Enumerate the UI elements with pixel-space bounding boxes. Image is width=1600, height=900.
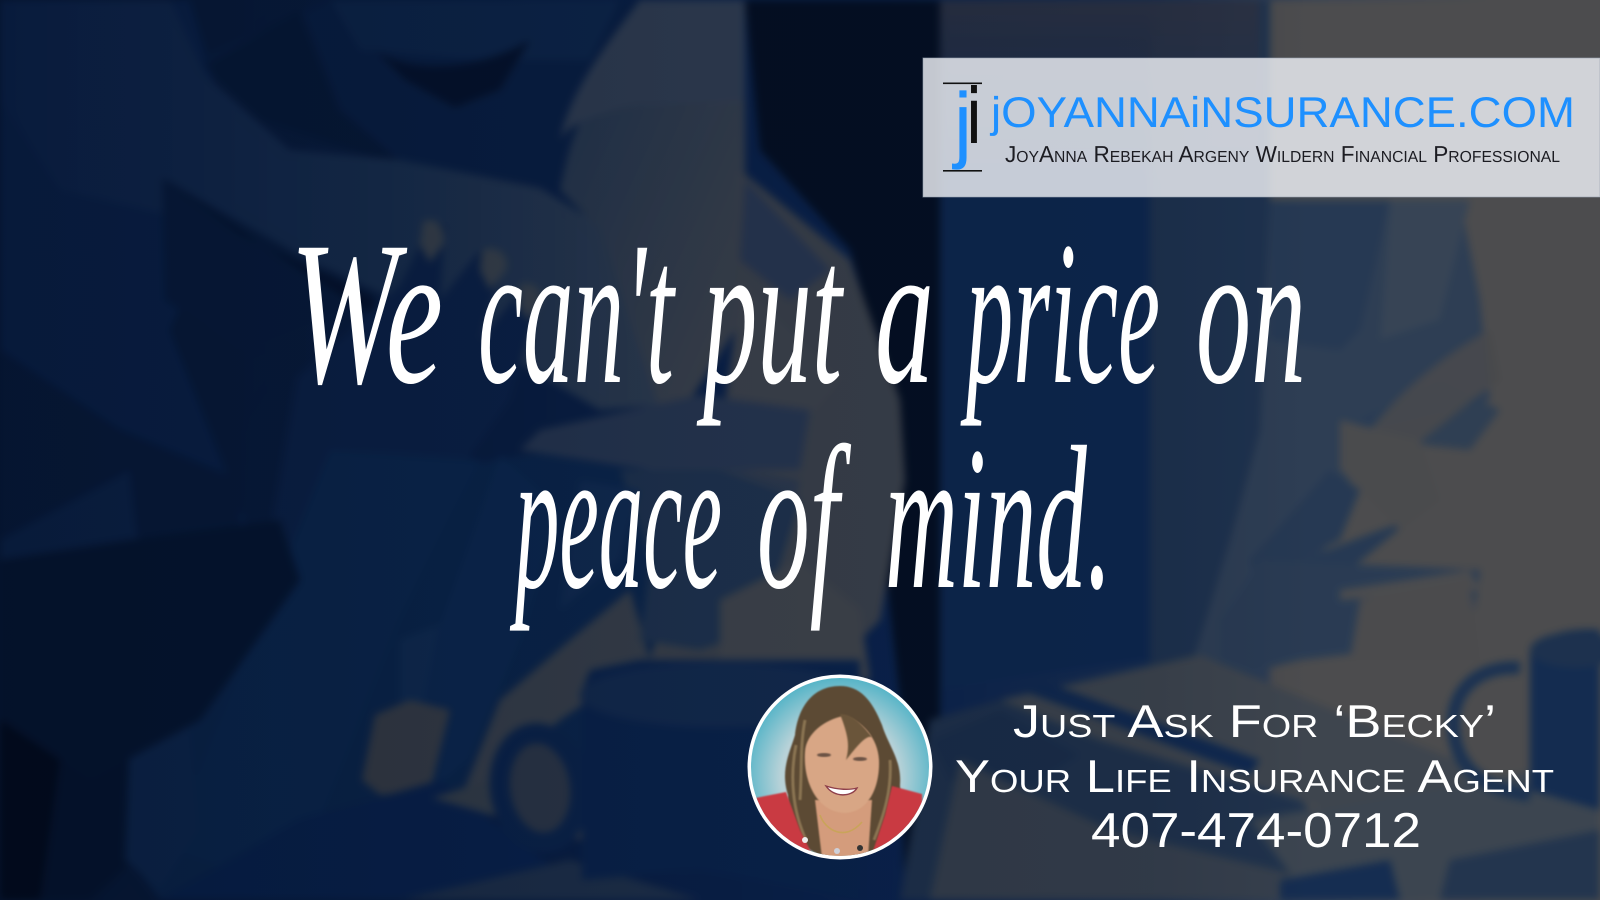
red jacket bbox=[756, 785, 924, 852]
beard bbox=[375, 40, 530, 108]
title: headline quote: peace bbox=[509, 405, 722, 632]
icon: ji monogram: j bbox=[951, 76, 972, 171]
cloth folds bbox=[170, 450, 480, 880]
eyes bbox=[817, 753, 831, 757]
dark sleeve bottom bbox=[160, 780, 600, 900]
face bbox=[805, 716, 879, 813]
woman's sleeve and arm bbox=[560, 0, 745, 410]
hand on the arm bbox=[240, 225, 540, 600]
title: headline quote: mind. bbox=[885, 405, 1112, 632]
far background dark column bbox=[745, 0, 940, 900]
draped cloth bbox=[640, 170, 905, 690]
title: headline quote: price bbox=[960, 200, 1160, 427]
hair strands over face bbox=[840, 714, 872, 760]
woman's fingers on lower arm bbox=[520, 395, 810, 470]
title: headline quote: of bbox=[757, 405, 851, 632]
mug bbox=[493, 728, 587, 848]
icon: ji monogram bbox=[943, 71, 982, 172]
paper under mug bbox=[432, 770, 600, 840]
centre column and curtain region bbox=[940, 0, 1160, 690]
desk items lower right bbox=[1000, 655, 1520, 850]
icon: ji monogram: i bbox=[968, 71, 980, 160]
smile bbox=[826, 786, 857, 795]
text block: call to action: Just Ask For ‘Becky’ bbox=[1013, 695, 1496, 747]
text block: call to action: 407-474-0712 bbox=[1091, 804, 1421, 858]
patterned curtain bbox=[1190, 200, 1490, 680]
website address: jOYANNAiNSURANCE.COM bbox=[989, 89, 1575, 137]
title: headline quote: put bbox=[696, 200, 845, 427]
neck and chest bbox=[815, 800, 872, 858]
dark gap under arm bbox=[162, 178, 370, 350]
title: headline quote: a bbox=[875, 200, 934, 427]
title: headline quote: We bbox=[290, 200, 443, 427]
text block: call to action bbox=[955, 695, 1554, 858]
necklace bbox=[820, 815, 862, 833]
hand at top left and man's arm bbox=[0, 0, 680, 410]
tattooed forearm bbox=[0, 520, 300, 780]
neck and chest bbox=[200, 0, 740, 190]
agent subtitle: JoyAnna Rebekah Argeny Wildern Financial Professional bbox=[1005, 141, 1560, 167]
title: headline quote: on bbox=[1196, 200, 1306, 427]
hair bbox=[785, 686, 900, 855]
panel: logo banner bbox=[923, 58, 1600, 197]
left torso and shirt bbox=[0, 0, 260, 600]
title: headline quote bbox=[290, 200, 1306, 632]
text block: call to action: Your Life Insurance Agent bbox=[955, 750, 1554, 802]
title: headline quote: can't bbox=[478, 200, 676, 427]
icon: agent portrait bbox=[745, 674, 932, 860]
